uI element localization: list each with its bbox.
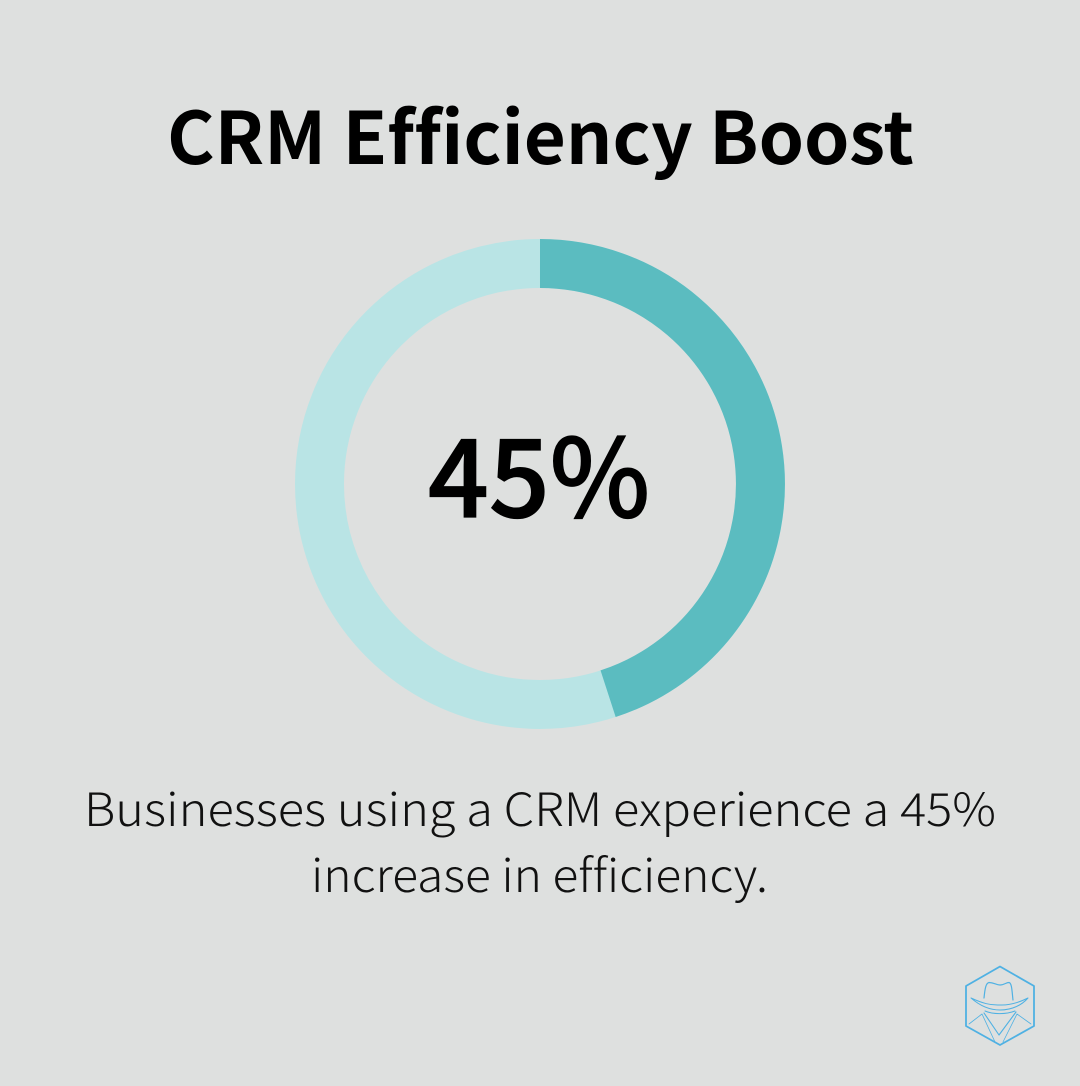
icon: hat and coat logo in hexagon	[966, 966, 1034, 1045]
hexagon outline	[966, 966, 1034, 1045]
coat collar	[984, 1012, 1016, 1035]
center value: 45%	[428, 393, 650, 549]
description text	[84, 774, 996, 906]
hat brim	[971, 998, 1028, 1010]
description line 1: Businesses using a CRM experience a 45%	[84, 774, 996, 840]
donut track: remaining 55%	[320, 264, 760, 704]
donut chart	[320, 264, 760, 704]
face shadow	[985, 1011, 1015, 1014]
description line 2: increase in efficiency.	[311, 840, 768, 906]
title: CRM Efficiency Boost	[167, 80, 914, 185]
donut segment: 45%	[540, 264, 760, 694]
hat crown	[984, 982, 1013, 1000]
coat shoulders	[969, 1014, 1031, 1042]
